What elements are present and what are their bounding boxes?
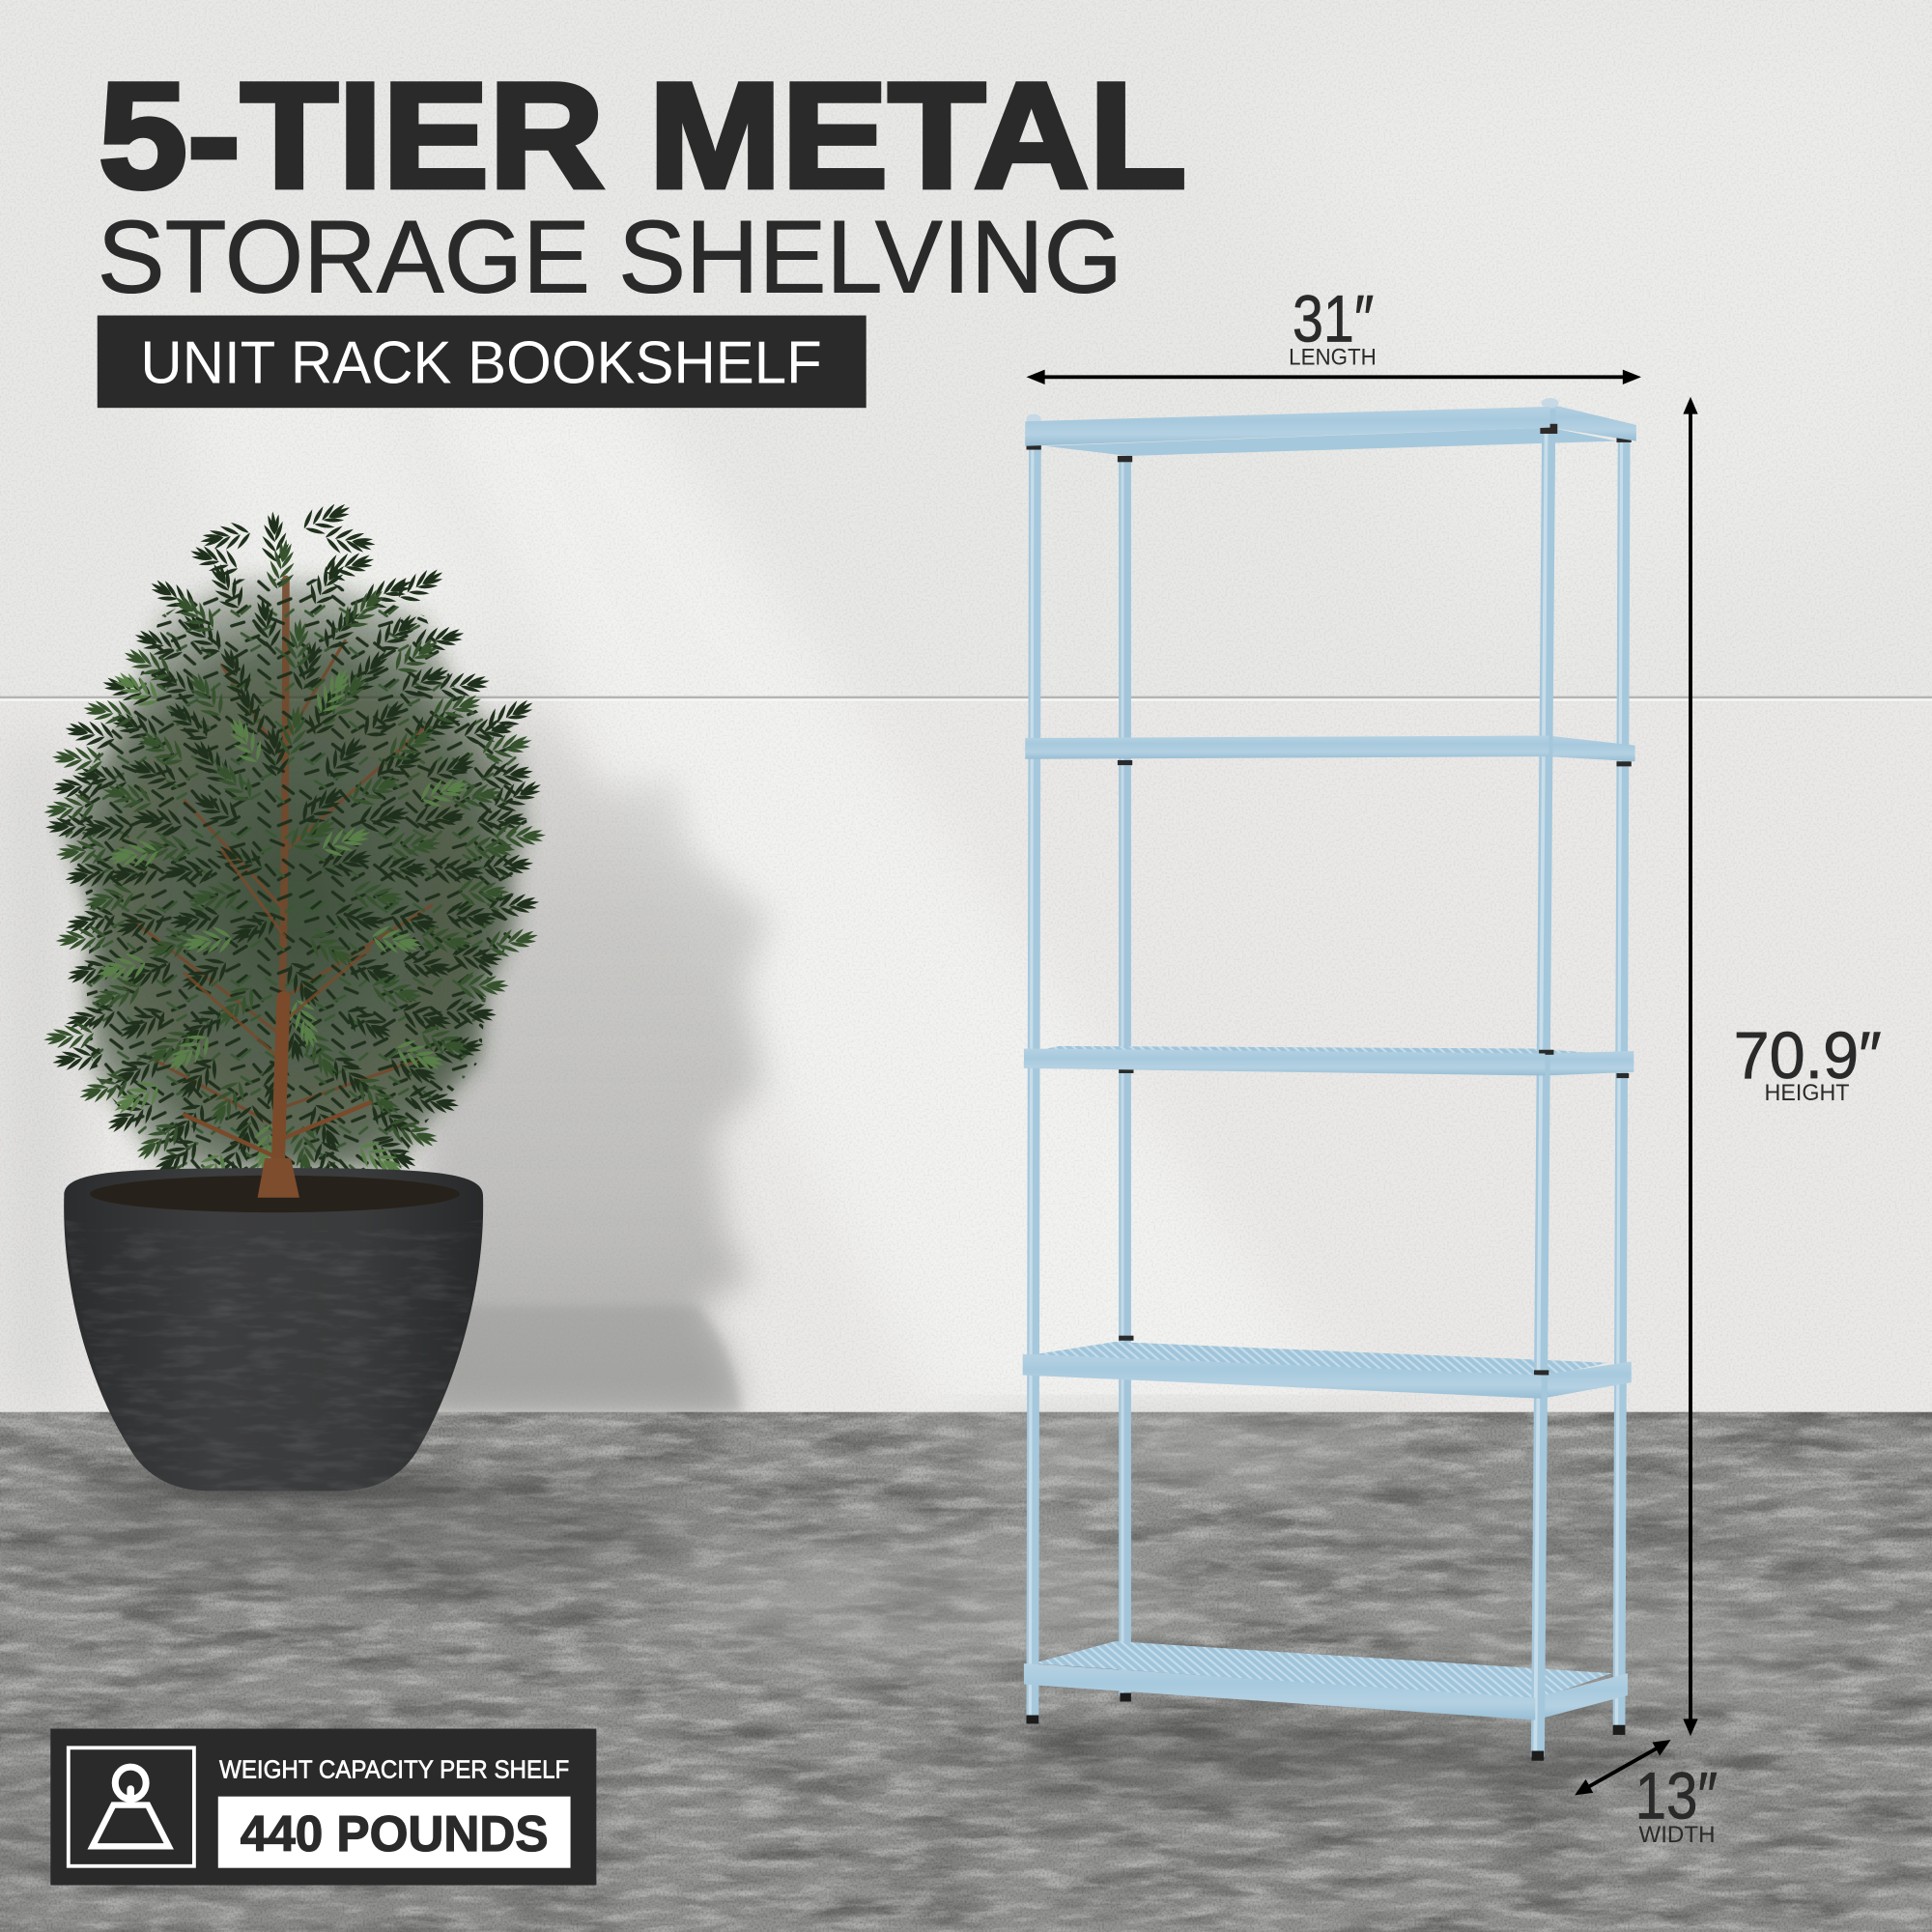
pot body xyxy=(64,1168,483,1491)
subtitle: storage shelving: STORAGE SHELVING xyxy=(98,198,1122,314)
plant trunk and main limbs xyxy=(185,850,370,1195)
tier 2 shelf xyxy=(1118,735,1635,766)
banner: unit rack bookshelf xyxy=(98,316,867,408)
weight capacity label: WEIGHT CAPACITY PER SHELF xyxy=(219,1755,569,1784)
label: 31 inch length: LENGTH xyxy=(1289,345,1377,371)
front bands xyxy=(1023,407,1550,1720)
title: 5-tier metal: 5-TIER METAL xyxy=(99,51,1186,219)
weight value xyxy=(218,1797,571,1868)
plant leaf texture xyxy=(49,567,542,1177)
trunk base xyxy=(258,1158,299,1198)
tier 1 top shelf xyxy=(1026,398,1636,462)
arrow: width xyxy=(1575,1740,1671,1795)
shelving unit xyxy=(1023,398,1636,1762)
background: concrete floor xyxy=(0,1412,1932,1932)
weight capacity badge xyxy=(50,1729,596,1886)
label: 70.9 inch height: 70.9″ xyxy=(1734,1018,1882,1093)
plant leaf sprays: light green xyxy=(93,661,474,1206)
icon: weight xyxy=(69,1747,194,1866)
pot shadow on floor xyxy=(80,1476,499,1501)
plant foliage underlay xyxy=(62,579,527,1171)
pot texture xyxy=(66,1220,482,1491)
label: 31 inch length: 31″ xyxy=(1293,281,1374,355)
background: wall xyxy=(0,0,1932,1417)
plant leaf sprays: dark xyxy=(45,494,547,1195)
weight value: 440 POUNDS xyxy=(241,1806,549,1862)
label: 13 inch width: 13″ xyxy=(1635,1759,1718,1833)
banner: unit rack bookshelf: UNIT RACK BOOKSHELF xyxy=(140,329,822,397)
pot soil xyxy=(90,1176,460,1212)
tier 4 shelf xyxy=(1029,1336,1632,1399)
rear posts xyxy=(1120,441,1625,1735)
arrow: height xyxy=(1683,397,1698,1736)
plant shadow on wall xyxy=(419,696,770,1412)
potted plant xyxy=(42,494,547,1501)
label: 70.9 inch height: HEIGHT xyxy=(1765,1080,1850,1106)
plant leaf sprays: mid green xyxy=(42,536,547,1178)
shadow base lobe on wall xyxy=(419,1306,742,1412)
tier 5 bottom shelf xyxy=(1033,1641,1628,1720)
tier 3 shelf xyxy=(1035,1046,1634,1078)
front posts xyxy=(1026,409,1557,1761)
arrow: length xyxy=(1026,370,1641,384)
plant branches xyxy=(129,579,431,1182)
label: 13 inch width: WIDTH xyxy=(1638,1822,1716,1848)
shadows under unit xyxy=(1033,1725,1619,1762)
